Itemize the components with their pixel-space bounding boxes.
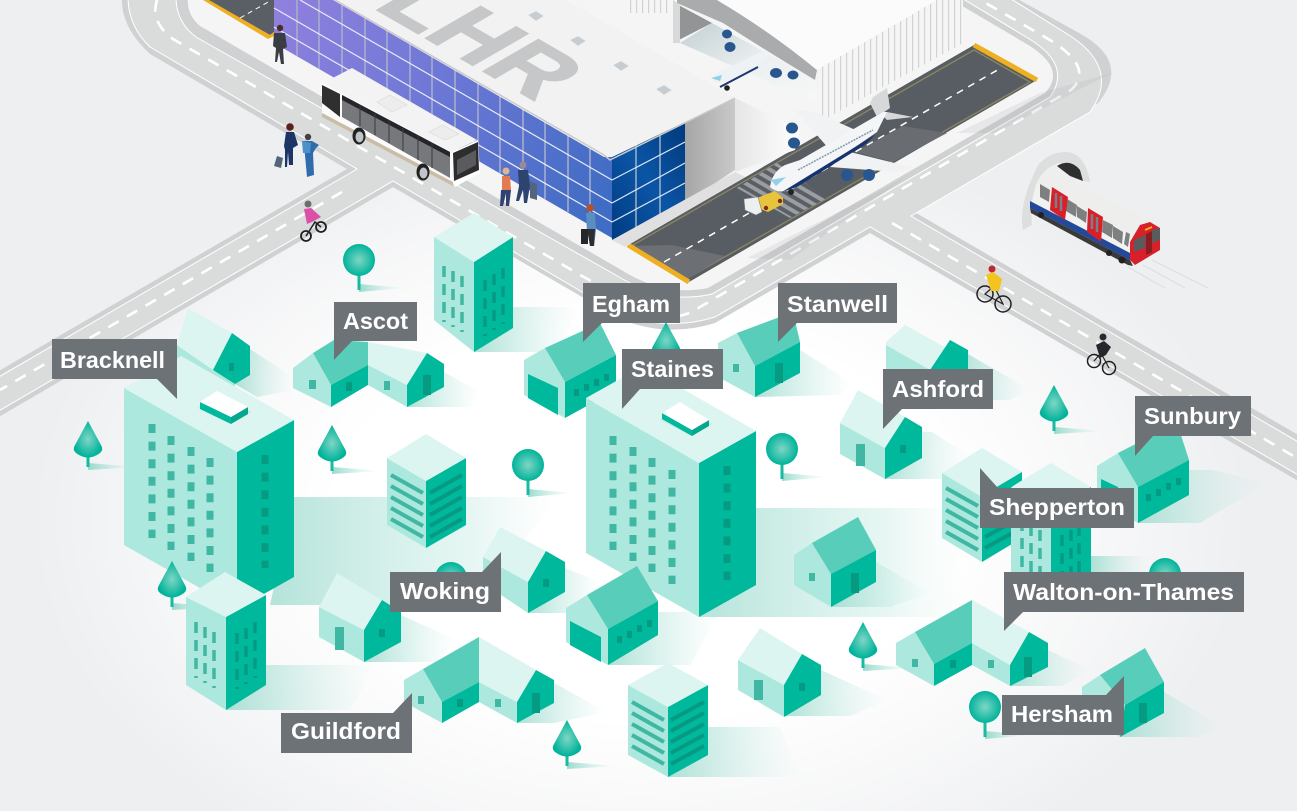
terminal building xyxy=(274,0,800,247)
bus roof xyxy=(323,68,477,152)
hangar roof xyxy=(717,0,937,70)
family of travellers xyxy=(500,162,537,206)
road network xyxy=(0,0,1297,482)
house: garage centre xyxy=(566,566,658,665)
dark glass end xyxy=(612,122,685,240)
label: Bracknell: Bracknell xyxy=(60,347,165,373)
house: centre east xyxy=(794,517,876,607)
tower: behind Shepperton xyxy=(995,463,1091,600)
tower: north block xyxy=(434,213,513,352)
label: Shepperton xyxy=(980,468,1134,528)
tree xyxy=(343,244,405,292)
businessman xyxy=(273,25,287,64)
train windows xyxy=(1040,184,1130,247)
small parked plane xyxy=(711,50,768,91)
runway top left xyxy=(203,0,274,39)
house: Stanwell xyxy=(718,312,800,397)
pale passage wall xyxy=(735,98,800,172)
cyclist black xyxy=(1088,334,1116,374)
label: Bracknell xyxy=(52,339,177,399)
label: Egham xyxy=(583,283,680,342)
wings xyxy=(795,110,915,172)
label: Walton-on-Thames: Walton-on-Thames xyxy=(1013,579,1234,605)
runway main xyxy=(628,45,1037,282)
tunnel portal xyxy=(1022,152,1090,230)
train body xyxy=(1030,183,1131,260)
hangar xyxy=(630,0,963,123)
label: Stanwell xyxy=(778,283,897,342)
bus front xyxy=(452,140,480,187)
house: west xyxy=(319,573,401,662)
train cab xyxy=(1130,222,1160,265)
bus xyxy=(322,68,480,187)
hangar opening xyxy=(680,23,815,102)
label: Guildford xyxy=(281,693,412,753)
label: Staines: Staines xyxy=(631,356,714,382)
hangar truss xyxy=(677,0,817,80)
house: behind Bracknell xyxy=(177,308,250,398)
fuselage xyxy=(770,112,887,192)
underground train and tunnel xyxy=(1022,152,1208,288)
track lines xyxy=(1128,260,1208,288)
cyclist yellow xyxy=(977,266,1011,312)
roof xyxy=(333,0,735,157)
label: Guildford: Guildford xyxy=(291,718,401,744)
train doors xyxy=(1050,187,1103,242)
bus side xyxy=(322,83,453,182)
striped block: centre xyxy=(387,434,466,548)
train stripes xyxy=(1030,201,1130,260)
label: Sunbury xyxy=(1135,396,1251,456)
tail xyxy=(870,88,913,120)
striped block: Shepperton xyxy=(942,448,1022,562)
glass facade xyxy=(274,0,612,238)
house: Sunbury xyxy=(1097,423,1189,523)
shadows over road xyxy=(747,73,1112,260)
label: Staines xyxy=(622,349,723,409)
tower: Staines xyxy=(586,366,756,617)
bus wheels xyxy=(352,128,430,180)
tower: Bracknell xyxy=(124,356,294,609)
house: behind Ashford xyxy=(886,325,968,385)
label: Ashford: Ashford xyxy=(892,376,984,402)
tree xyxy=(652,322,716,371)
cyclist pink xyxy=(301,200,326,241)
label: Shepperton: Shepperton xyxy=(989,494,1125,520)
label: Walton-on-Thames xyxy=(1004,572,1244,631)
block: south of Bracknell xyxy=(186,572,266,710)
label: Ascot xyxy=(334,302,417,360)
house: south centre xyxy=(738,628,821,717)
hangar engines xyxy=(722,30,798,80)
skylights xyxy=(528,11,672,95)
house: Hersham xyxy=(1082,648,1164,737)
house: Walton pair xyxy=(896,600,1048,686)
house: Egham xyxy=(524,323,616,418)
bus side windows xyxy=(342,95,450,178)
ground shadows xyxy=(226,307,1267,777)
grey end wall xyxy=(685,98,735,203)
label: Egham: Egham xyxy=(592,291,670,317)
label: Woking xyxy=(390,552,501,612)
plane engines xyxy=(786,122,875,181)
house: Ascot pair xyxy=(293,340,444,407)
label: Woking: Woking xyxy=(400,578,490,604)
striped block: south xyxy=(628,663,708,777)
label: Hersham: Hersham xyxy=(1011,701,1113,727)
bus rear window xyxy=(322,85,340,117)
airliner on apron xyxy=(770,88,915,195)
train roof xyxy=(1037,168,1150,236)
airport tug xyxy=(744,191,783,215)
ribbed side xyxy=(817,0,963,123)
apron strip xyxy=(612,172,745,247)
label: Ashford xyxy=(883,369,993,429)
label: Sunbury: Sunbury xyxy=(1144,403,1241,429)
label: Ascot: Ascot xyxy=(343,308,408,334)
house: Ashford xyxy=(840,390,922,479)
house: Woking xyxy=(483,527,565,613)
travellers: woman and man xyxy=(274,123,319,177)
trees xyxy=(74,385,1211,769)
woman with suitcase xyxy=(581,204,596,246)
zebra apron xyxy=(737,163,827,218)
label: Hersham xyxy=(1002,676,1124,735)
label: Stanwell: Stanwell xyxy=(787,291,888,317)
house: Guildford pair xyxy=(404,637,554,723)
